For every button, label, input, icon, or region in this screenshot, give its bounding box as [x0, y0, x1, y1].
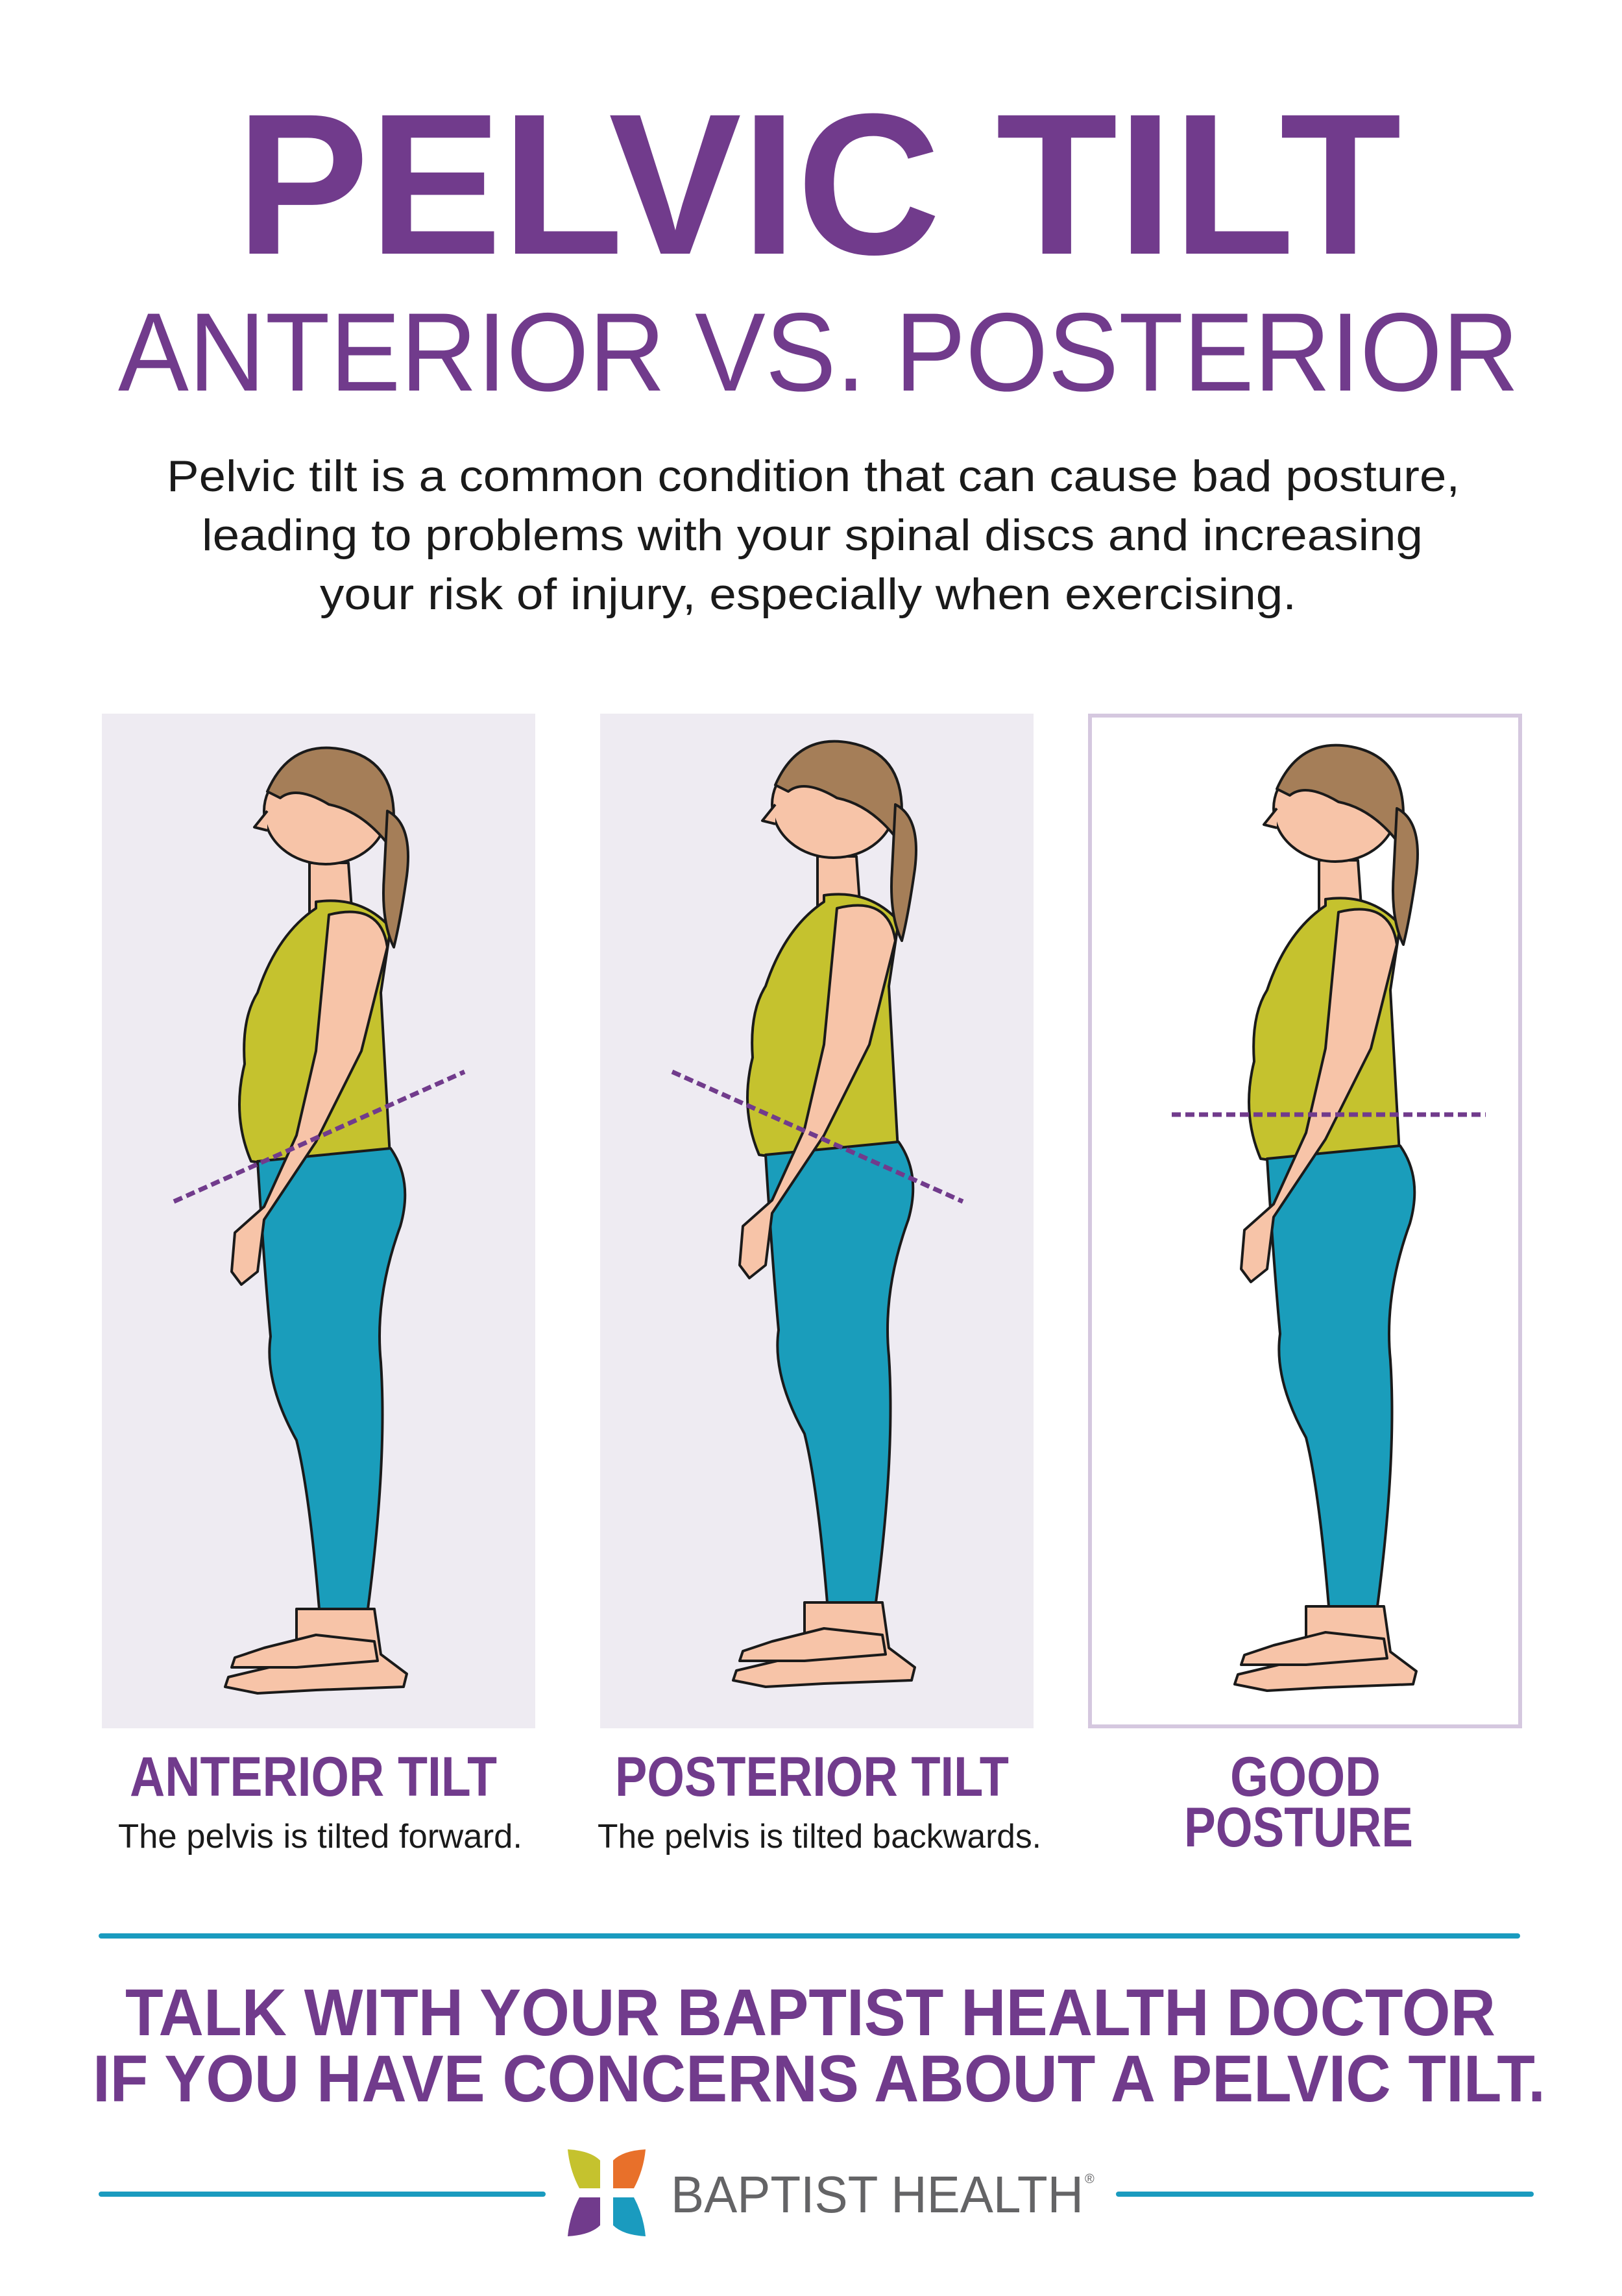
- level line: [1172, 1112, 1486, 1117]
- tilt line: [174, 1072, 465, 1202]
- subtitle: ANTERIOR VS. POSTERIOR: [118, 290, 1519, 415]
- call to action: TALK WITH YOUR BAPTIST HEALTH DOCTOR: [125, 1976, 1495, 2049]
- intro paragraph: your risk of injury, especially when exercising.: [320, 570, 1296, 619]
- tilt line: [672, 1072, 963, 1202]
- panel: anterior tilt: [102, 714, 535, 1728]
- panel: good posture: [1088, 714, 1522, 1728]
- panel labels: [118, 1746, 1413, 1859]
- logo: Baptist Health: ®: [1085, 2172, 1095, 2186]
- figure: anterior: [225, 748, 408, 1693]
- label: anterior tilt: The pelvis is tilted forward.: [118, 1818, 522, 1855]
- label: good posture: [1184, 1746, 1413, 1859]
- call to action: [93, 1976, 1545, 2116]
- label: anterior tilt: ANTERIOR TILT: [130, 1746, 497, 1808]
- panel: posterior tilt: [600, 714, 1034, 1728]
- label: anterior tilt: [118, 1746, 522, 1855]
- label: posterior tilt: The pelvis is tilted backwards.: [598, 1818, 1041, 1855]
- icon: four petals: [568, 2149, 646, 2236]
- figure: posterior: [733, 742, 916, 1687]
- figure: good posture: [1235, 745, 1418, 1691]
- call to action: IF YOU HAVE CONCERNS ABOUT A PELVIC TILT.: [93, 2042, 1545, 2116]
- intro paragraph: leading to problems with your spinal discs and increasing: [202, 511, 1423, 560]
- label: posterior tilt: [598, 1746, 1041, 1855]
- label: good posture: GOOD: [1230, 1746, 1381, 1808]
- wordmark: BAPTIST HEALTH: [671, 2166, 1083, 2223]
- intro paragraph: Pelvic tilt is a common condition that can cause bad posture,: [167, 452, 1460, 501]
- title: PELVIC TILT: [236, 71, 1401, 296]
- intro paragraph: [167, 452, 1460, 619]
- title block: [118, 71, 1519, 619]
- label: posterior tilt: POSTERIOR TILT: [615, 1746, 1009, 1808]
- logo: Baptist Health: [568, 2149, 1095, 2236]
- label: good posture: POSTURE: [1184, 1796, 1413, 1859]
